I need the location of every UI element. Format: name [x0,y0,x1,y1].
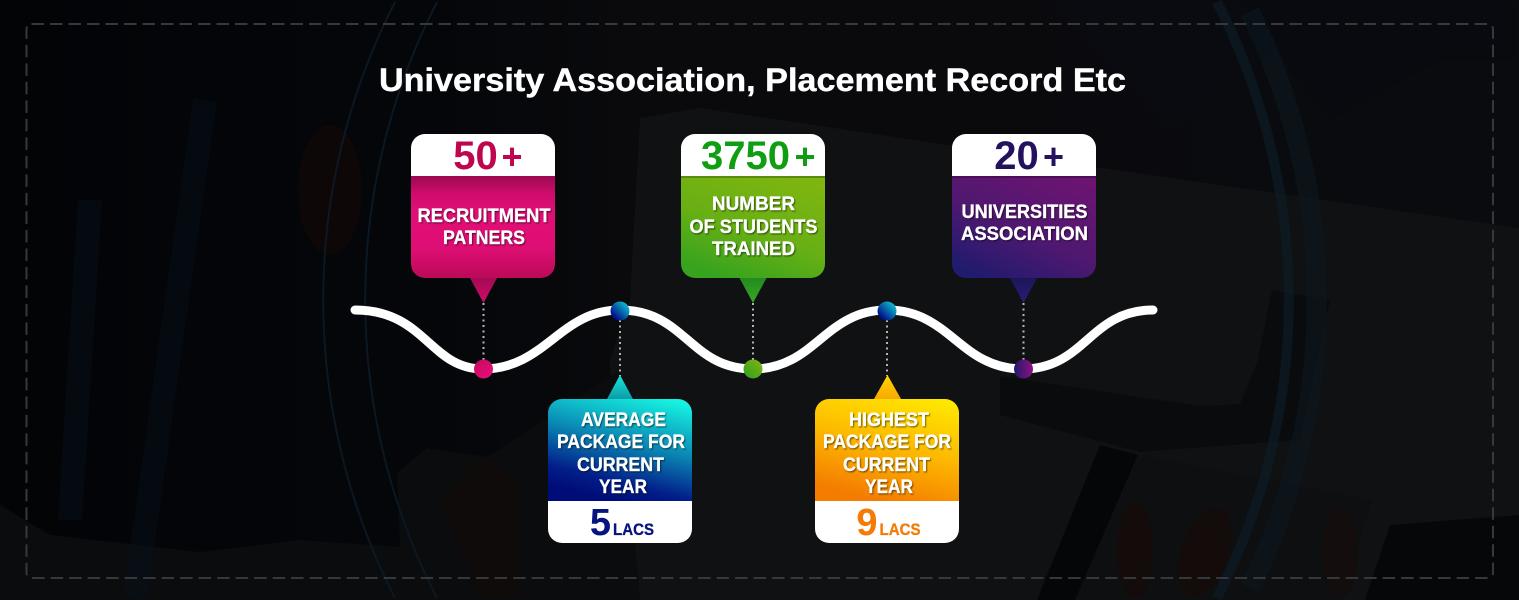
label: highest package for current year: CURRENT [843,454,930,476]
label: recruitment patners: PATNERS [443,227,525,249]
value: 9 lacs: LACS [880,520,920,539]
node: teal [610,302,630,320]
stat: 50+: + [501,136,523,177]
label: highest package for current year: HIGHEST [849,409,929,431]
stat: 3750+: + [794,136,816,177]
label: highest package for current year: YEAR [865,476,913,498]
label: number of students trained: NUMBER [712,193,795,215]
value: 5 lacs: LACS [613,520,654,539]
label: average package for current year: PACKAGE FOR [557,431,685,453]
node: pink [474,360,493,378]
label: average package for current year: CURRENT [577,454,664,476]
pointer: average package [607,375,633,399]
stat: 50+: 50 [453,134,498,178]
node: purple [1014,360,1033,378]
label: average package for current year: AVERAGE [581,409,666,431]
label: universities association: ASSOCIATION [961,223,1088,245]
pointer: recruitment partners [470,278,497,303]
card: average package [548,375,692,544]
card: recruitment partners [411,134,555,303]
node: blue [878,302,896,320]
card: students trained [681,134,825,303]
wave timeline [355,310,1153,369]
node: green [744,360,762,378]
card: highest package [815,375,959,544]
pointer: students trained [740,278,766,303]
label: average package for current year: YEAR [599,476,647,498]
pointer: universities association [1010,278,1037,303]
value: 5 lacs: 5 [590,502,611,544]
label: number of students trained: OF STUDENTS [690,216,818,238]
node markers [474,302,1033,378]
pointer: highest package [874,375,901,399]
card: universities association [952,134,1096,303]
value: 9 lacs: 9 [856,502,878,544]
label: universities association: UNIVERSITIES [962,201,1088,223]
dotted connectors [484,303,1024,376]
title: University Association, Placement Record Etc [379,62,1126,98]
label: number of students trained: TRAINED [712,238,795,260]
stat: 3750+: 3750 [701,134,790,178]
label: highest package for current year: PACKAGE FOR [823,431,951,453]
label: recruitment patners: RECRUITMENT [418,205,551,227]
stat: 20+: 20 [994,134,1039,178]
stat: 20+: + [1043,136,1064,177]
